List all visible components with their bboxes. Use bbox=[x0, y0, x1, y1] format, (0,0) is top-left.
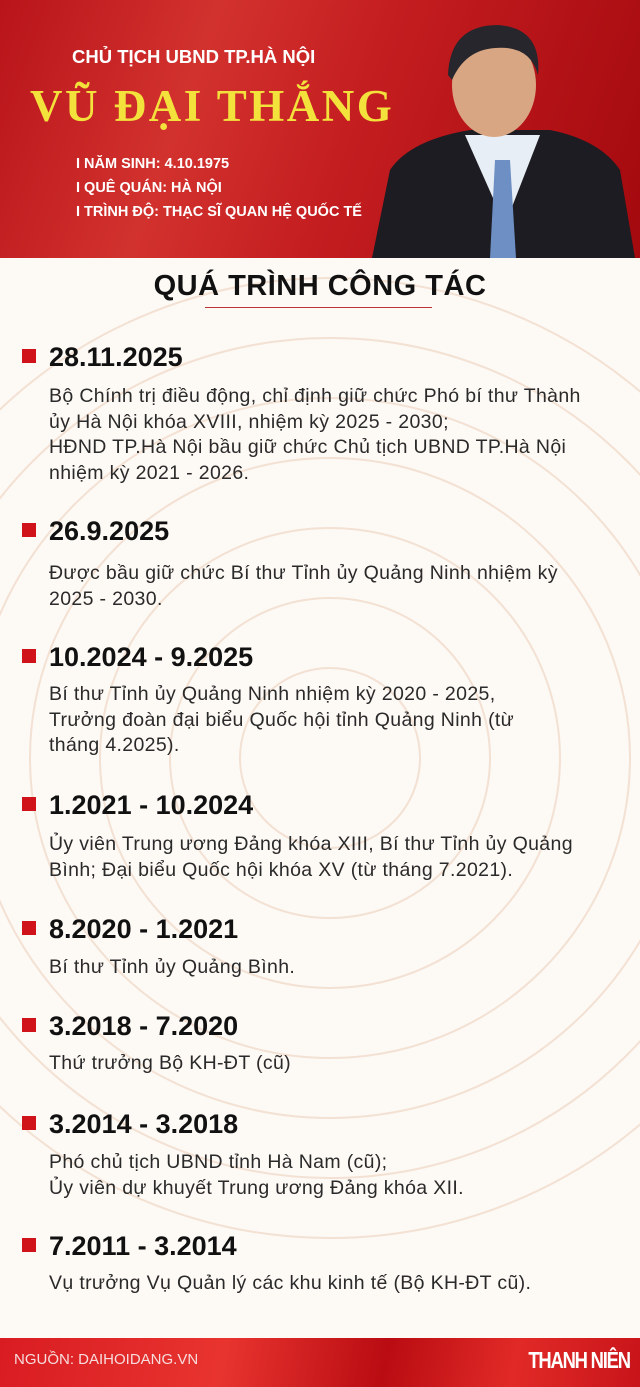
entry 1: 28.11.2025 bbox=[49, 342, 183, 372]
subtitle: CHỦ TỊCH UBND TP.HÀ NỘI bbox=[72, 46, 315, 67]
entry 2: 2025 - 2030. bbox=[49, 588, 163, 610]
entry 5: Bí thư Tỉnh ủy Quảng Bình. bbox=[49, 956, 295, 978]
entry 7: Ủy viên dự khuyết Trung ương Đảng khóa XII. bbox=[49, 1176, 464, 1198]
entry 4 bbox=[22, 790, 573, 880]
info list: I TRÌNH ĐỘ: THẠC SĨ QUAN HỆ QUỐC TẾ bbox=[76, 204, 362, 220]
entry 1 bbox=[22, 342, 581, 484]
entry 8: 7.2011 - 3.2014 bbox=[49, 1231, 237, 1261]
entry 1: Bộ Chính trị điều động, chỉ định giữ chức Phó bí thư Thành bbox=[49, 385, 581, 407]
footer banner bbox=[0, 1338, 640, 1387]
entry 4: Bình; Đại biểu Quốc hội khóa XV (từ tháng 7.2021). bbox=[49, 858, 513, 880]
entry 8: Vụ trưởng Vụ Quản lý các khu kinh tế (Bộ KH-ĐT cũ). bbox=[49, 1272, 531, 1294]
entry 2 bbox=[22, 516, 558, 610]
entry 3 bbox=[22, 642, 514, 756]
entry 1: ủy Hà Nội khóa XVIII, nhiệm kỳ 2025 - 2030; bbox=[49, 410, 449, 432]
logo: THANH NIÊN bbox=[529, 1347, 630, 1373]
entry 1: nhiệm kỳ 2021 - 2026. bbox=[49, 462, 249, 484]
info list: I NĂM SINH: 4.10.1975 bbox=[76, 156, 229, 172]
portrait photo bbox=[372, 25, 635, 258]
background drum pattern bbox=[0, 277, 640, 1239]
entry 3: Trưởng đoàn đại biểu Quốc hội tỉnh Quảng Ninh (từ bbox=[49, 708, 514, 730]
entry 5: 8.2020 - 1.2021 bbox=[49, 914, 238, 944]
name title: VŨ ĐẠI THẮNG bbox=[30, 81, 394, 131]
section heading: QUÁ TRÌNH CÔNG TÁC bbox=[154, 270, 486, 302]
entry 2: Được bầu giữ chức Bí thư Tỉnh ủy Quảng Ninh nhiệm kỳ bbox=[49, 562, 558, 584]
info list bbox=[76, 155, 362, 220]
entry 1: HĐND TP.Hà Nội bầu giữ chức Chủ tịch UBND TP.Hà Nội bbox=[49, 436, 566, 458]
entry 3: 10.2024 - 9.2025 bbox=[49, 642, 253, 672]
entry 6 bbox=[22, 1011, 291, 1074]
source text: NGUỒN: DAIHOIDANG.VN bbox=[14, 1351, 198, 1368]
header banner bbox=[0, 0, 640, 258]
entry 7: Phó chủ tịch UBND tỉnh Hà Nam (cũ); bbox=[49, 1151, 387, 1173]
info list: I QUÊ QUÁN: HÀ NỘI bbox=[76, 180, 222, 196]
entry 6: Thứ trưởng Bộ KH-ĐT (cũ) bbox=[49, 1052, 291, 1074]
entry 6: 3.2018 - 7.2020 bbox=[49, 1011, 238, 1041]
entry 5 bbox=[22, 914, 295, 978]
entry 3: Bí thư Tỉnh ủy Quảng Ninh nhiệm kỳ 2020 - 2025, bbox=[49, 683, 495, 705]
entry 4: Ủy viên Trung ương Đảng khóa XIII, Bí thư Tỉnh ủy Quảng bbox=[49, 833, 573, 855]
entry 4: 1.2021 - 10.2024 bbox=[49, 790, 253, 820]
entry 7: 3.2014 - 3.2018 bbox=[49, 1109, 238, 1139]
entry 3: tháng 4.2025). bbox=[49, 734, 180, 756]
entry 8 bbox=[22, 1231, 531, 1294]
entry 2: 26.9.2025 bbox=[49, 516, 169, 546]
entry 7 bbox=[22, 1109, 464, 1198]
